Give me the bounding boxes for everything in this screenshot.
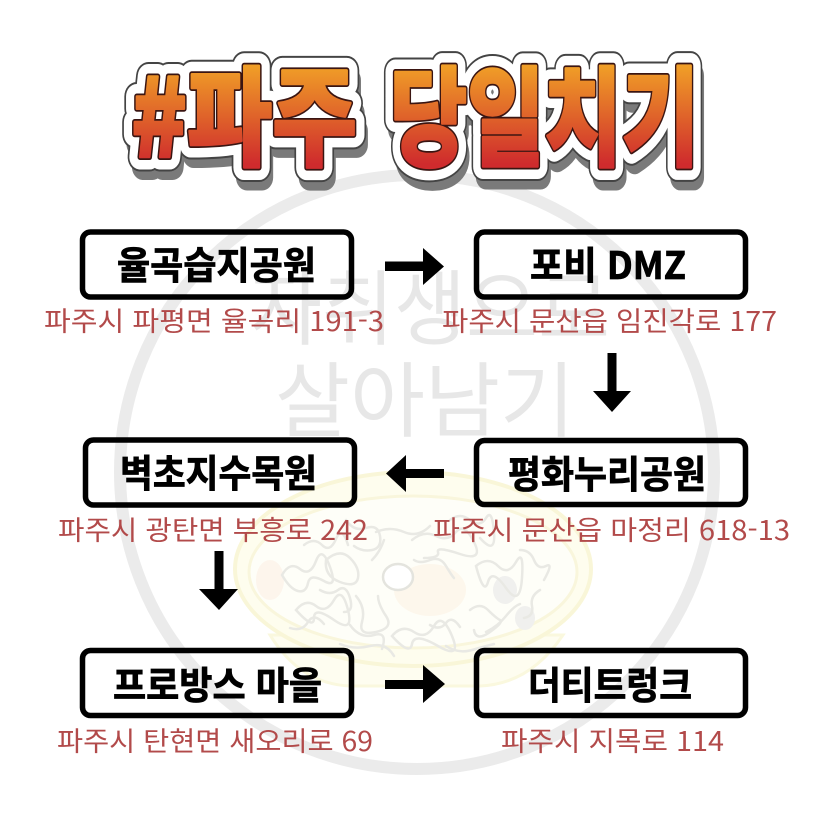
title sticker dark edge: #파주 [131, 33, 357, 189]
step 6: 더티트렁크: 더티트렁크 [528, 655, 692, 710]
watermark: noodle bowl [235, 472, 591, 686]
step 1: 율곡습지공원 [44, 232, 384, 339]
title sticker white [131, 33, 699, 189]
watermark: circular logo [120, 175, 714, 769]
title sticker dark edge: 당일치기 [390, 33, 699, 189]
step 1: 율곡습지공원: 율곡습지공원 [117, 235, 316, 290]
step 3: 평화누리공원: 파주시 문산읍 마정리 618-13 [433, 509, 790, 548]
step 3: 평화누리공원: 평화누리공원 [508, 444, 706, 499]
title sticker white: #파주 [131, 33, 357, 189]
title dark letter outline: 당일치기 [390, 33, 699, 189]
arrow: step 3 to step 4 [386, 455, 444, 492]
title dark letter outline [131, 33, 699, 189]
watermark ring [120, 175, 714, 769]
arrow: step 2 to step 3 [593, 353, 631, 412]
step 1: 율곡습지공원: 파주시 파평면 율곡리 191-3 [44, 300, 384, 339]
arrow: step 1 to step 2 [385, 248, 444, 285]
step 3: 평화누리공원 [433, 440, 790, 548]
title sticker dark edge [131, 33, 699, 189]
step 5: 프로방스 마을 [57, 650, 373, 759]
arrow: step 5 to step 6 [385, 665, 445, 703]
title sticker white: 당일치기 [390, 33, 699, 189]
watermark text: 살아남기 [275, 335, 575, 454]
step 2: 포비 DMZ [442, 232, 777, 339]
step 2: 포비 DMZ: 파주시 문산읍 임진각로 177 [442, 300, 777, 339]
step 6: 더티트렁크 [476, 650, 746, 759]
step 2: 포비 DMZ: 포비 DMZ [530, 235, 686, 290]
title sticker shadow: 당일치기 [393, 43, 702, 199]
title gradient lettering [131, 33, 699, 189]
title dark letter outline: #파주 [131, 33, 357, 189]
watermark text [250, 243, 610, 454]
title gradient lettering: #파주 [131, 33, 357, 189]
step 6: 더티트렁크: 파주시 지목로 114 [501, 720, 724, 759]
watermark text: 자취생으로 [250, 243, 610, 362]
step 4: 벽초지수목원: 벽초지수목원 [120, 443, 317, 498]
title sticker shadow [134, 43, 702, 199]
arrow: step 4 to step 5 [199, 551, 238, 610]
title sticker shadow: #파주 [134, 43, 360, 199]
title: #파주 당일치기 [131, 33, 702, 199]
step 4: 벽초지수목원 [58, 440, 368, 548]
title gradient lettering: 당일치기 [390, 33, 699, 189]
step 5: 프로방스 마을: 프로방스 마을 [113, 655, 322, 710]
step 5: 프로방스 마을: 파주시 탄현면 새오리로 69 [57, 720, 373, 759]
step 4: 벽초지수목원: 파주시 광탄면 부흥로 242 [58, 509, 368, 548]
